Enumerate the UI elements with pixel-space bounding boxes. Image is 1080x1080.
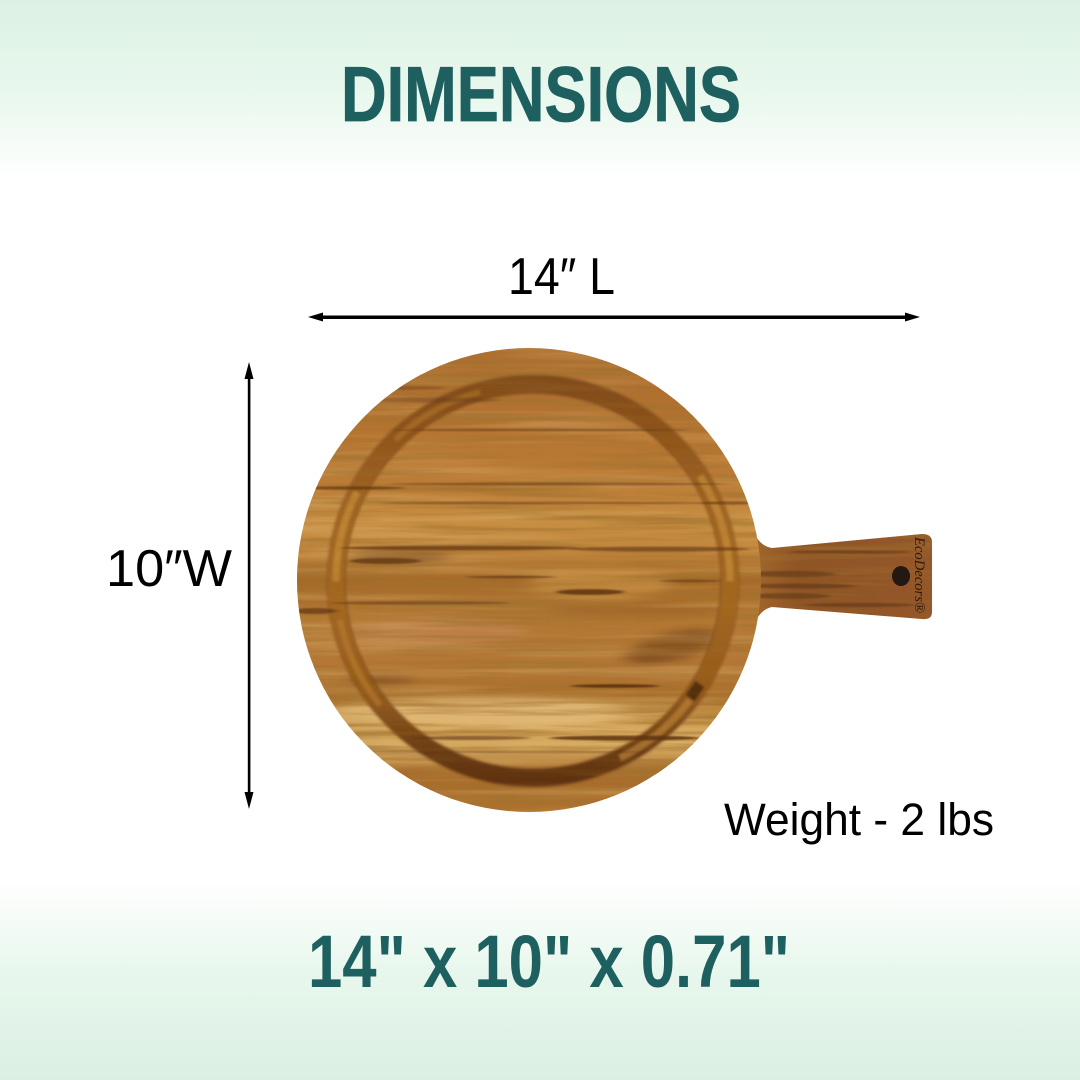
length label: 14″ L: [508, 248, 615, 306]
wooden board product: [290, 340, 935, 820]
arrow: width: [244, 362, 254, 809]
handle hole: [892, 566, 910, 586]
juice groove: [327, 375, 739, 787]
arrow: length: [308, 312, 920, 322]
title: DIMENSIONS: [341, 50, 741, 138]
handle brand mark: EcoDecors®: [911, 536, 927, 613]
weight label: Weight - 2 lbs: [724, 794, 994, 845]
broad colour zones: [334, 544, 716, 750]
round board: [290, 340, 770, 820]
width label: 10″W: [106, 540, 232, 598]
wood grain: [290, 340, 770, 820]
board handle: [757, 534, 932, 620]
top gradient band: [0, 0, 1080, 182]
bottom gradient band: [0, 880, 1080, 1080]
overall size heading: 14" x 10" x 0.71": [308, 920, 790, 1003]
